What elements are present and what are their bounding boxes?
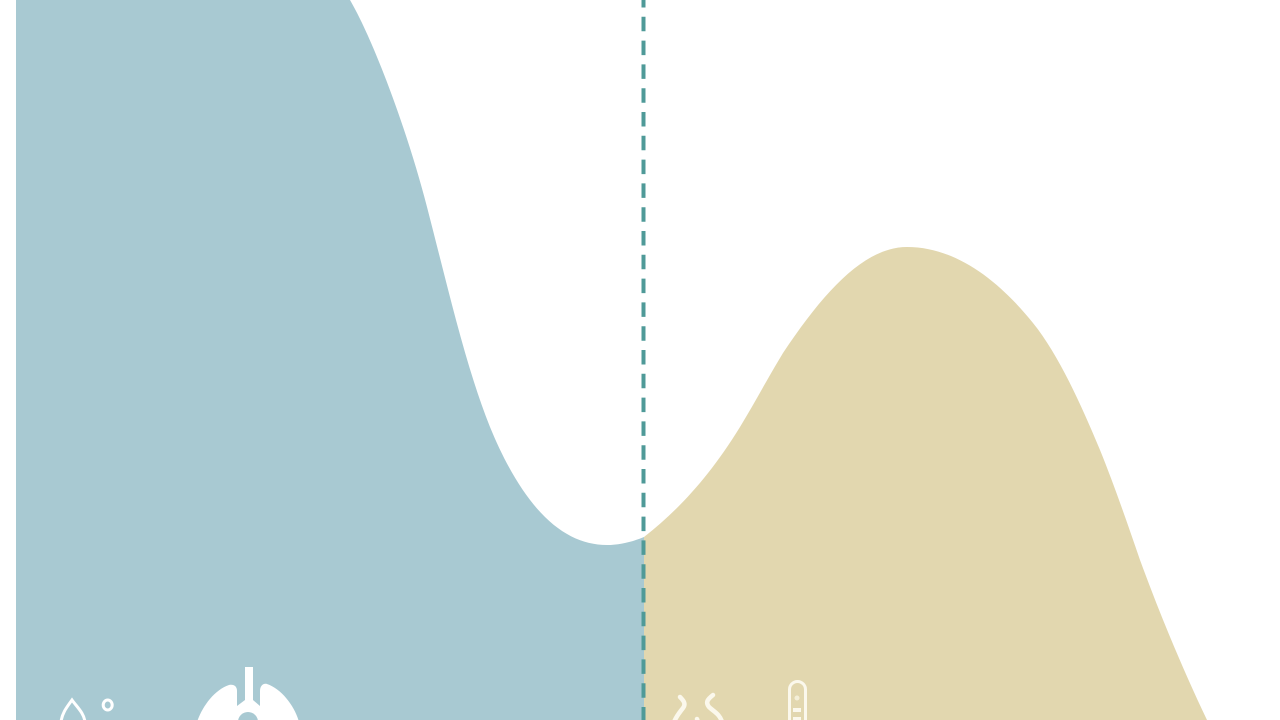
dashed divider line <box>642 0 646 720</box>
icon: thermometer <box>790 682 806 720</box>
icon: lungs <box>197 667 299 720</box>
icon: heat waves <box>674 695 722 720</box>
icon: water drops <box>61 700 112 720</box>
blue area: left curve <box>16 0 644 720</box>
tan area: right curve <box>644 247 1207 720</box>
